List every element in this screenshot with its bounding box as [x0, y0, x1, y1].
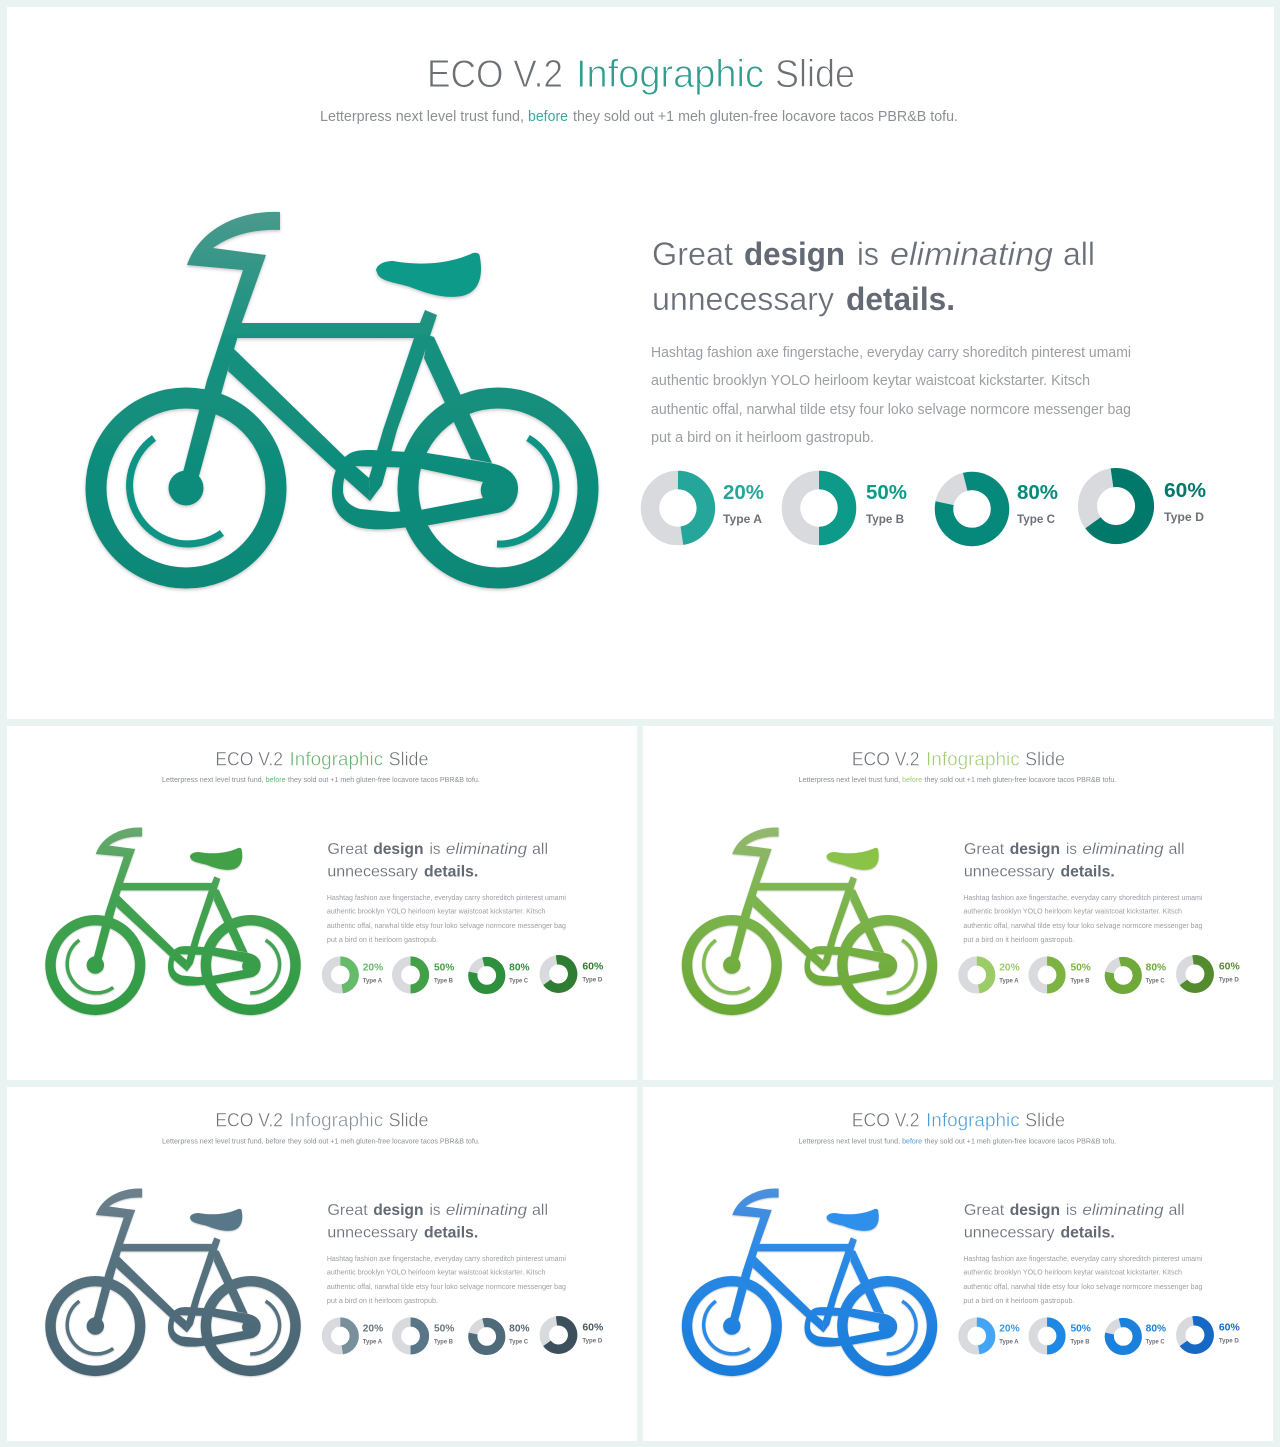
donut: type C — [1109, 962, 1166, 989]
subtitle: they sold out +1 meh gluten-free locavore tacos PBR&B tofu. — [925, 775, 1116, 784]
body text: authentic offal, narwhal tilde etsy four loko selvage normcore messenger bag — [327, 921, 566, 930]
heading: is — [1066, 841, 1077, 858]
donut: type B — [791, 480, 907, 536]
subtitle: they sold out +1 meh gluten-free locavore tacos PBR&B tofu. — [288, 775, 480, 784]
heading: unnecessary — [327, 1224, 418, 1241]
heading: is — [1066, 1202, 1077, 1219]
title: Infographic — [926, 748, 1020, 770]
subtitle: Letterpress next level trust fund, — [799, 1136, 900, 1145]
heading: unnecessary — [964, 863, 1055, 880]
donut: type C: Type C — [1146, 978, 1165, 984]
donut: type A: Type A — [363, 978, 383, 984]
donut: type B: 50% — [434, 963, 455, 974]
donut: type A: 20% — [999, 1324, 1020, 1335]
title: Infographic — [576, 53, 764, 96]
subtitle — [799, 775, 1116, 784]
heading: is — [429, 841, 440, 858]
body text: Hashtag fashion axe fingerstache, everyday carry shoreditch pinterest umami — [327, 1254, 566, 1263]
donut: type C: 80% — [1146, 1324, 1166, 1335]
donut: type D: 60% — [1219, 962, 1240, 973]
icon: bicycle — [51, 1189, 296, 1371]
donut: type B: Type B — [866, 512, 904, 526]
title: ECO V.2 — [215, 748, 283, 770]
title: Slide — [389, 748, 428, 770]
donut: type C: Type C — [509, 978, 529, 984]
body text: put a bird on it heirloom gastropub. — [963, 1296, 1074, 1305]
panel: green slide — [7, 726, 637, 1080]
title: ECO V.2 — [852, 1109, 920, 1131]
donut: type A: Type A — [723, 512, 762, 526]
heading: design — [744, 236, 845, 272]
subtitle: Letterpress next level trust fund, — [799, 775, 900, 784]
icon: bicycle — [687, 1189, 932, 1371]
body text: authentic offal, narwhal tilde etsy four loko selvage normcore messenger bag — [963, 921, 1202, 930]
panel: blue slide — [643, 1087, 1273, 1441]
donut: type A — [963, 961, 1020, 989]
subtitle: Letterpress next level trust fund, — [320, 109, 524, 125]
body text: authentic brooklyn YOLO heirloom keytar waistcoat kickstarter. Kitsch — [327, 907, 546, 916]
heading: unnecessary — [327, 863, 418, 880]
donut: type B — [1033, 961, 1091, 989]
heading — [327, 841, 548, 880]
title: Infographic — [926, 1109, 1020, 1131]
body text: authentic brooklyn YOLO heirloom keytar waistcoat kickstarter. Kitsch — [651, 373, 1090, 389]
donut: type B: 50% — [1070, 963, 1091, 974]
title: Slide — [389, 1109, 428, 1131]
donut: type C — [1109, 1323, 1166, 1350]
donut: type B — [1033, 1322, 1091, 1350]
donut: type A — [326, 1322, 383, 1350]
title — [852, 1109, 1065, 1131]
body text: Hashtag fashion axe fingerstache, everyday carry shoreditch pinterest umami — [963, 893, 1203, 902]
heading: eliminating — [1082, 841, 1164, 858]
heading: all — [532, 841, 548, 858]
donut: type D: Type D — [1219, 977, 1239, 983]
donut: type D: Type D — [582, 977, 603, 983]
donut: type B: 50% — [866, 482, 907, 504]
body text — [327, 1254, 566, 1305]
donut: type C — [473, 962, 530, 989]
subtitle: Letterpress next level trust fund, — [162, 775, 264, 784]
heading: is — [429, 1202, 440, 1219]
heading — [327, 1202, 548, 1241]
heading: all — [1169, 1202, 1185, 1219]
donut: type C: Type C — [1146, 1339, 1165, 1345]
body text: authentic offal, narwhal tilde etsy four loko selvage normcore messenger bag — [651, 402, 1131, 418]
heading: eliminating — [446, 1202, 527, 1219]
heading: details. — [424, 1224, 478, 1241]
body text: authentic offal, narwhal tilde etsy four loko selvage normcore messenger bag — [327, 1282, 566, 1291]
donut: type D — [1181, 960, 1240, 988]
donut: type B — [397, 1322, 455, 1350]
donut: type A: Type A — [363, 1339, 383, 1345]
title: Slide — [1025, 1109, 1065, 1131]
title: Slide — [775, 53, 855, 96]
donut: type A: 20% — [363, 963, 383, 974]
heading: details. — [1061, 1224, 1115, 1241]
donut: type A — [650, 480, 764, 536]
heading: design — [1010, 841, 1060, 858]
donut: type D: Type D — [582, 1338, 603, 1344]
donut: type C: 80% — [509, 1324, 530, 1335]
heading: Great — [652, 236, 733, 272]
title: Slide — [1025, 748, 1065, 770]
subtitle: they sold out +1 meh gluten-free locavore tacos PBR&B tofu. — [925, 1136, 1116, 1145]
heading: eliminating — [1082, 1202, 1164, 1219]
subtitle — [799, 1136, 1116, 1145]
title: Infographic — [290, 748, 383, 770]
heading: Great — [964, 1202, 1005, 1219]
donut: type C: 80% — [1017, 482, 1058, 504]
donut: type D: 60% — [1219, 1323, 1240, 1334]
donut: type D: 60% — [582, 1323, 603, 1334]
donut: type C: Type C — [509, 1339, 529, 1345]
body text — [963, 893, 1203, 944]
heading: design — [1010, 1202, 1060, 1219]
heading: all — [1063, 236, 1095, 272]
title — [427, 53, 855, 96]
heading: Great — [964, 841, 1005, 858]
body text: put a bird on it heirloom gastropub. — [963, 935, 1074, 944]
donut: type D — [544, 960, 603, 988]
body text — [327, 893, 566, 944]
donut: type C — [473, 1323, 530, 1350]
heading: all — [532, 1202, 548, 1219]
heading: details. — [1061, 863, 1115, 880]
donut: type C — [944, 481, 1058, 537]
body text: authentic brooklyn YOLO heirloom keytar waistcoat kickstarter. Kitsch — [963, 907, 1182, 916]
heading: all — [1169, 841, 1185, 858]
donut: type B — [397, 961, 455, 989]
donut: type D — [544, 1321, 603, 1349]
donut: type C: Type C — [1017, 512, 1055, 526]
donut: type A: Type A — [999, 978, 1019, 984]
body text: Hashtag fashion axe fingerstache, everyday carry shoreditch pinterest umami — [651, 345, 1131, 361]
donut: type A: 20% — [723, 482, 764, 504]
panel: main teal slide — [7, 7, 1274, 719]
heading: unnecessary — [652, 281, 834, 317]
donut: type D: 60% — [582, 962, 603, 973]
subtitle: before — [902, 775, 922, 784]
donut: type C: 80% — [509, 963, 530, 974]
heading: unnecessary — [964, 1224, 1055, 1241]
body text: put a bird on it heirloom gastropub. — [327, 935, 438, 944]
subtitle: they sold out +1 meh gluten-free locavore tacos PBR&B tofu. — [573, 109, 958, 125]
heading: eliminating — [446, 841, 527, 858]
heading — [964, 1202, 1185, 1241]
body text: put a bird on it heirloom gastropub. — [651, 430, 874, 446]
body text: put a bird on it heirloom gastropub. — [327, 1296, 438, 1305]
body text: Hashtag fashion axe fingerstache, everyday carry shoreditch pinterest umami — [327, 893, 566, 902]
heading: design — [373, 841, 424, 858]
donut: type A: Type A — [999, 1339, 1019, 1345]
title: ECO V.2 — [215, 1109, 283, 1131]
title: ECO V.2 — [427, 53, 563, 96]
donut: type A: 20% — [363, 1324, 383, 1335]
body text: authentic brooklyn YOLO heirloom keytar waistcoat kickstarter. Kitsch — [327, 1268, 546, 1277]
subtitle: before — [266, 1136, 286, 1145]
subtitle: before — [266, 775, 286, 784]
heading: Great — [327, 1202, 368, 1219]
body text: Hashtag fashion axe fingerstache, everyday carry shoreditch pinterest umami — [963, 1254, 1203, 1263]
donut: type D: Type D — [1164, 510, 1204, 524]
icon: bicycle — [687, 828, 932, 1010]
donut: type D: 60% — [1164, 480, 1206, 502]
donut: type B: 50% — [1070, 1324, 1091, 1335]
heading — [964, 841, 1185, 880]
heading: details. — [846, 281, 955, 317]
title — [852, 748, 1065, 770]
donut: type B: Type B — [434, 978, 454, 984]
donut: type D — [1088, 478, 1206, 535]
body text — [651, 345, 1131, 446]
heading: Great — [327, 841, 368, 858]
subtitle: Letterpress next level trust fund, — [162, 1136, 264, 1145]
panel: lime slide — [643, 726, 1273, 1080]
heading: details. — [424, 863, 478, 880]
donut: type A: 20% — [999, 963, 1020, 974]
title — [215, 748, 428, 770]
donut: type D: Type D — [1219, 1338, 1239, 1344]
body text — [963, 1254, 1203, 1305]
heading: is — [857, 236, 879, 272]
title — [215, 1109, 428, 1131]
donut: type B: 50% — [434, 1324, 455, 1335]
title: Infographic — [290, 1109, 383, 1131]
subtitle: they sold out +1 meh gluten-free locavore tacos PBR&B tofu. — [288, 1136, 480, 1145]
subtitle: before — [528, 109, 568, 125]
donut: type C: 80% — [1146, 963, 1166, 974]
donut: type B: Type B — [434, 1339, 454, 1345]
body text: authentic brooklyn YOLO heirloom keytar waistcoat kickstarter. Kitsch — [963, 1268, 1182, 1277]
heading — [652, 236, 1095, 317]
subtitle — [162, 775, 480, 784]
donut: type B: Type B — [1070, 978, 1090, 984]
donut: type A — [326, 961, 383, 989]
panel: slate slide — [7, 1087, 637, 1441]
heading: design — [373, 1202, 424, 1219]
body text: authentic offal, narwhal tilde etsy four loko selvage normcore messenger bag — [963, 1282, 1202, 1291]
donut: type B: Type B — [1070, 1339, 1090, 1345]
subtitle: before — [902, 1136, 922, 1145]
subtitle — [320, 109, 958, 125]
donut: type D — [1181, 1321, 1240, 1349]
title: ECO V.2 — [852, 748, 920, 770]
icon: bicycle — [96, 212, 588, 578]
donut: type A — [963, 1322, 1020, 1350]
icon: bicycle — [51, 828, 296, 1010]
heading: eliminating — [890, 236, 1053, 272]
subtitle — [162, 1136, 480, 1145]
